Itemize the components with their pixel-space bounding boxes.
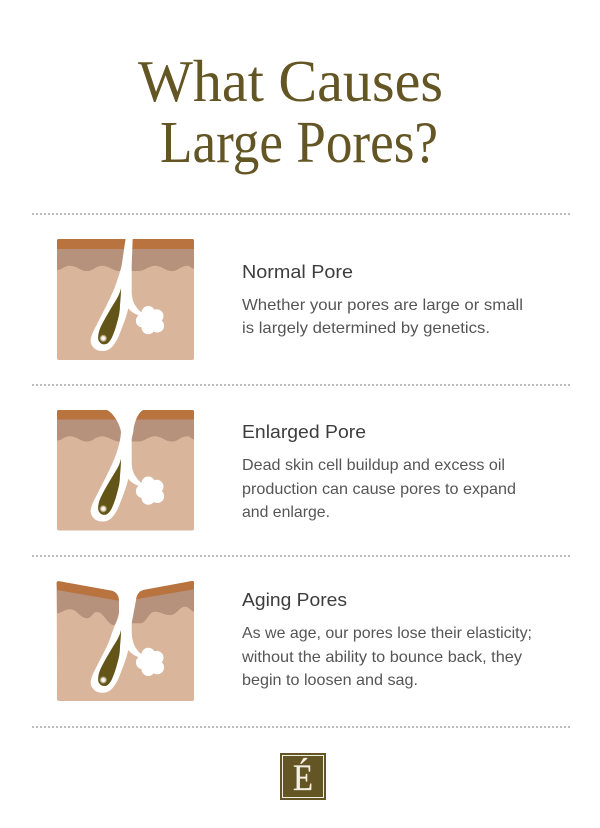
text: aging pores: As we age, our pores lose their elasticity; [242,625,532,642]
icon: enlarged pore diagram [57,408,194,530]
logo: É [293,757,313,799]
text: normal pore: Whether your pores are large or small [242,297,523,314]
text: enlarged pore: production can cause pores to expand [242,481,516,498]
title: Large Pores? [160,109,438,175]
text: enlarged pore: and enlarge. [242,504,330,521]
heading: enlarged pore: Enlarged Pore [242,421,366,442]
heading: aging pores: Aging Pores [242,589,347,610]
heading: normal pore: Normal Pore [242,261,353,282]
text: normal pore: is largely determined by genetics. [242,320,490,337]
text: aging pores: without the ability to bounce back, they [241,649,522,666]
text: enlarged pore [242,457,516,521]
text: aging pores [241,625,532,689]
title [138,48,443,175]
text: normal pore [242,297,523,337]
text: aging pores: begin to loosen and sag. [242,672,418,689]
icon: aging pore diagram [57,581,194,701]
icon: normal pore diagram [57,238,194,360]
logo [280,753,326,800]
text: enlarged pore: Dead skin cell buildup and excess oil [242,457,505,474]
title: What Causes [138,48,443,114]
